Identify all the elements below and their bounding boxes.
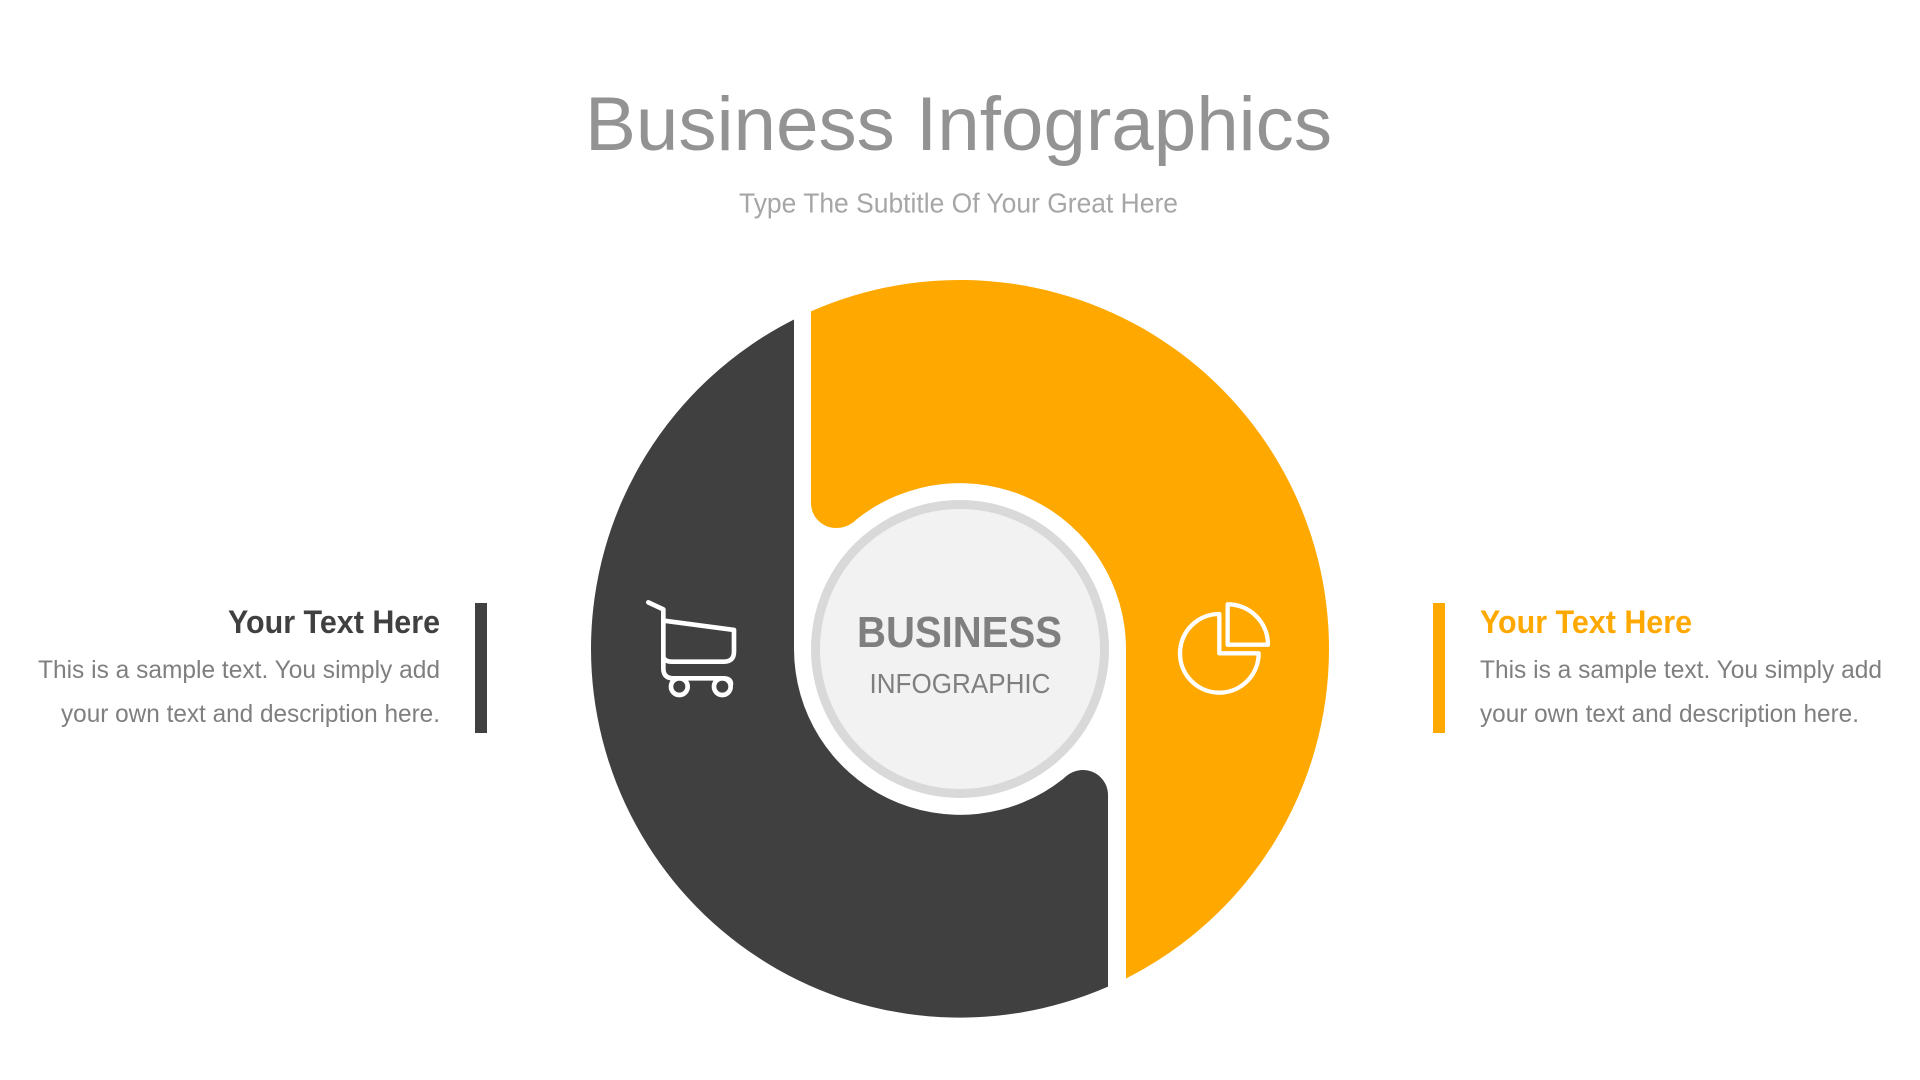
center label: business: BUSINESS xyxy=(857,608,1062,657)
right description: This is a sample text. You simply add xyxy=(1480,656,1882,684)
left description: your own text and description here. xyxy=(61,700,440,728)
panel: right text block xyxy=(1433,603,1882,733)
subtitle: Type The Subtitle Of Your Great Here xyxy=(739,188,1178,218)
left accent bar xyxy=(475,603,487,733)
title: Business Infographics xyxy=(585,82,1332,167)
right description: your own text and description here. xyxy=(1480,700,1859,728)
right accent bar xyxy=(1433,603,1445,733)
right heading: Your Text Here xyxy=(1480,604,1692,640)
right description xyxy=(1480,656,1882,728)
left description: This is a sample text. You simply add xyxy=(38,656,440,684)
segment: dark xyxy=(591,320,1108,1018)
panel: left text block xyxy=(38,603,487,733)
left description xyxy=(38,656,440,728)
center label: infographic: INFOGRAPHIC xyxy=(870,668,1050,699)
left heading: Your Text Here xyxy=(228,604,440,640)
icon: pie chart xyxy=(1180,604,1268,693)
icon: shopping cart xyxy=(648,602,734,695)
center circle xyxy=(816,504,1104,794)
chart: donut diagram xyxy=(591,280,1329,1018)
segment: orange xyxy=(811,280,1329,979)
